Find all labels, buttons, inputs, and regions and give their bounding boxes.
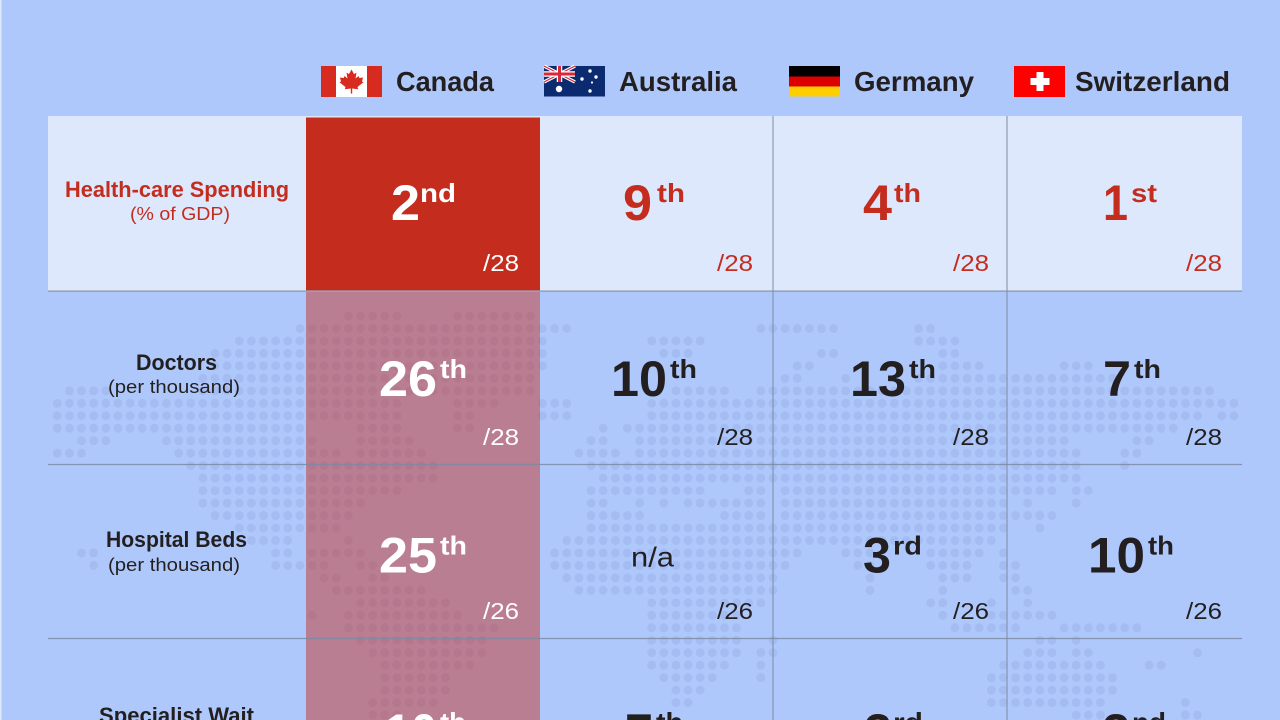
rank: Germany doctors: 13 (850, 351, 906, 407)
rank: Canada doctors: th (440, 354, 467, 384)
rank: Australia doctors: /28 (717, 424, 753, 450)
rank: Switzerland hospital beds: /26 (1186, 598, 1222, 624)
header: Germany (789, 66, 974, 97)
rank: Australia spending: /28 (717, 250, 753, 276)
panel: Canada spending cell (306, 118, 540, 292)
rank: Switzerland doctors: 7 (1103, 351, 1131, 407)
rank: Germany hospital beds: /26 (953, 598, 989, 624)
rank: Switzerland hospital beds (1088, 528, 1222, 624)
rank: Germany spending: th (894, 178, 921, 208)
rank: Switzerland specialist wait (1102, 704, 1166, 720)
row label: hospital beds: (per thousand) (108, 555, 240, 575)
rank: Australia doctors: th (670, 354, 697, 384)
rank: Germany doctors: th (909, 354, 936, 384)
row label: doctors (108, 350, 240, 397)
rank: Germany specialist wait (864, 704, 923, 720)
rank: Australia hospital beds (631, 542, 753, 624)
rank: Australia specialist wait (625, 704, 683, 720)
rank: Australia spending: th (657, 178, 685, 208)
row label: doctors: (per thousand) (108, 377, 240, 397)
rank: Australia hospital beds: /26 (717, 598, 753, 624)
rank: Australia hospital beds: n/a (631, 542, 674, 572)
rank: Australia spending: 9 (623, 175, 652, 231)
table grid lines (48, 116, 1242, 720)
rank: Switzerland hospital beds: th (1148, 530, 1174, 560)
rank: Germany spending: /28 (953, 250, 989, 276)
rank: Germany spending: 4 (863, 175, 892, 231)
rank: Switzerland spending: /28 (1186, 250, 1222, 276)
rank: Canada spending: 2 (391, 175, 420, 231)
rank: Canada doctors (379, 351, 519, 450)
rank: Germany doctors (850, 351, 989, 450)
header: Australia: Australia (619, 66, 737, 97)
row label: health-care spending: (% of GDP) (130, 204, 230, 224)
rank: Canada hospital beds: 25 (379, 528, 437, 584)
row label: doctors: Doctors (136, 350, 217, 375)
rank: Switzerland spending: 1 (1103, 175, 1128, 231)
rank: Canada specialist wait (385, 704, 466, 720)
rank: Switzerland doctors (1103, 351, 1222, 450)
rank: Australia doctors: 10 (611, 351, 667, 407)
rank: Australia spending (623, 175, 753, 276)
rank: Australia doctors (611, 351, 753, 450)
header: Germany: Germany (854, 66, 974, 97)
rank: Germany doctors: /28 (953, 424, 989, 450)
rank: Germany spending (863, 175, 989, 276)
header: Switzerland: Switzerland (1075, 66, 1230, 97)
rank: Canada hospital beds (379, 528, 519, 624)
rank: Canada spending: nd (420, 178, 456, 208)
rank: Canada spending (391, 175, 519, 276)
row label: hospital beds: Hospital Beds (106, 527, 247, 552)
header: Australia (544, 66, 737, 97)
rank: Switzerland doctors: /28 (1186, 424, 1222, 450)
rank: Switzerland spending (1103, 175, 1222, 276)
rank: Canada spending: /28 (483, 250, 519, 276)
row label: health-care spending (65, 177, 289, 224)
header: Canada (321, 66, 494, 97)
rank: Switzerland doctors: th (1134, 354, 1161, 384)
header: Canada: Canada (396, 66, 494, 97)
panel: health-care spending row background (48, 116, 1242, 291)
rank: Germany hospital beds: 3 (863, 528, 891, 584)
panel: Canada highlighted column (306, 291, 540, 720)
rank: Canada doctors: /28 (483, 424, 519, 450)
rank: Canada hospital beds: /26 (483, 598, 519, 624)
rank: Canada doctors: 26 (379, 351, 437, 407)
rank: Germany hospital beds: rd (893, 530, 922, 560)
dotted world map background (57, 316, 1235, 715)
rank: Switzerland hospital beds: 10 (1088, 528, 1145, 584)
rank: Switzerland spending: st (1131, 178, 1157, 208)
rank: Germany hospital beds (863, 528, 989, 624)
rank: Canada hospital beds: th (440, 530, 467, 560)
row label: health-care spending: Health-care Spending (65, 177, 289, 202)
row label: hospital beds (106, 527, 247, 575)
